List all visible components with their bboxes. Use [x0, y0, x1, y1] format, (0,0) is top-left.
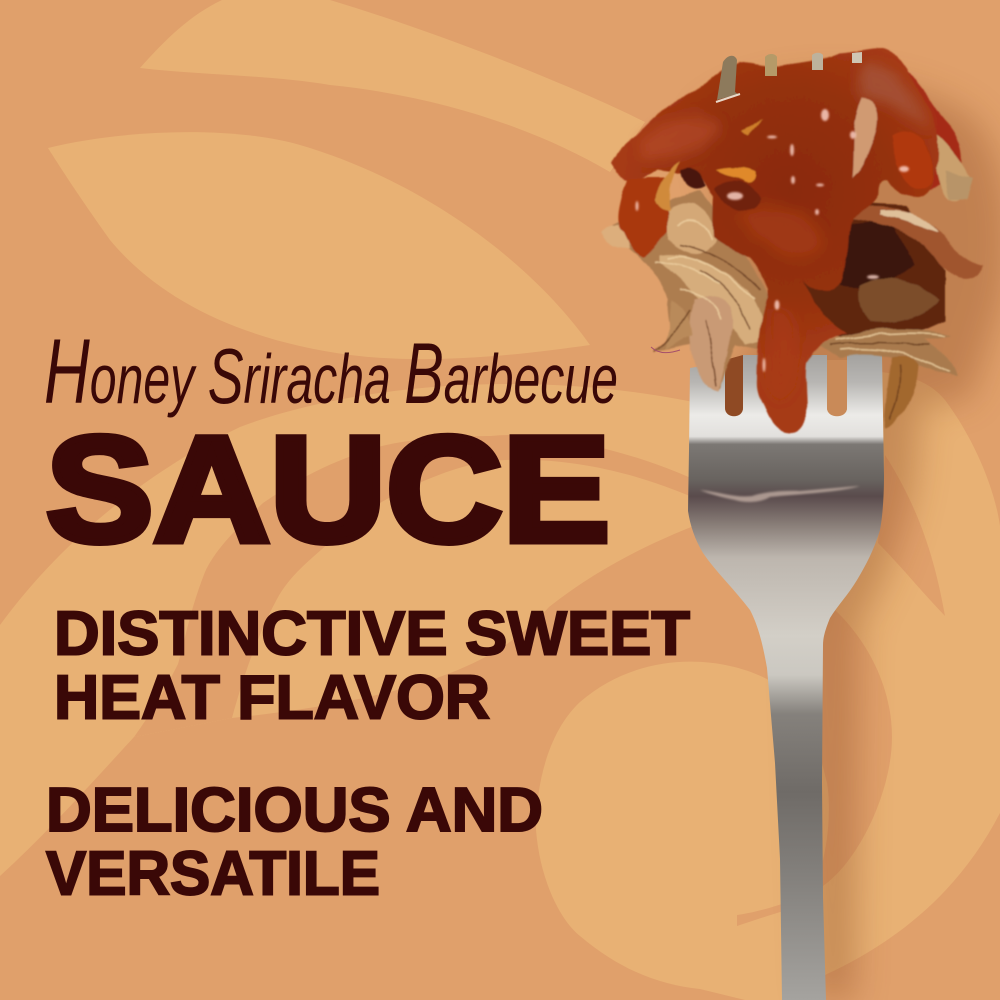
stray pink fibre	[651, 347, 680, 353]
sauce lighter patches	[860, 63, 930, 130]
sauce left drip	[618, 178, 672, 257]
feature text: versatility	[46, 776, 543, 908]
script heading: Honey Sriracha Barbecue	[44, 321, 618, 423]
background dark stripes	[134, 435, 945, 926]
sauce main mass	[612, 48, 938, 433]
fork slots showing meat	[725, 355, 743, 416]
meat strand strokes	[655, 220, 950, 372]
feature text: flavor: DISTINCTIVE SWEET	[54, 600, 690, 668]
fork prongs through sauce	[716, 52, 862, 102]
dark red meat back	[880, 50, 962, 190]
orange zest	[716, 168, 756, 183]
main heading: SAUCE	[46, 405, 610, 573]
upper right meat strand	[850, 206, 982, 279]
feature text: flavor: HEAT FLAVOR	[54, 664, 490, 732]
dark meat cavity	[790, 200, 945, 340]
pulled pork and sauce	[600, 48, 982, 433]
left tip of meat	[600, 225, 630, 248]
dark sauce pockets	[680, 167, 706, 189]
fork highlight	[700, 486, 860, 502]
shadow of fork and food	[700, 79, 1000, 1000]
left tan meat	[600, 190, 770, 388]
pale meat under sauce	[852, 98, 878, 178]
right sauce drop	[893, 131, 933, 189]
fork body	[688, 352, 884, 1000]
feature text: flavor	[54, 600, 690, 732]
sauce glints	[636, 109, 909, 372]
lower right strands	[820, 329, 958, 376]
feature text: versatility: DELICIOUS AND	[46, 776, 543, 845]
feature text: versatility: VERSATILE	[46, 840, 380, 908]
fork	[688, 352, 884, 1000]
